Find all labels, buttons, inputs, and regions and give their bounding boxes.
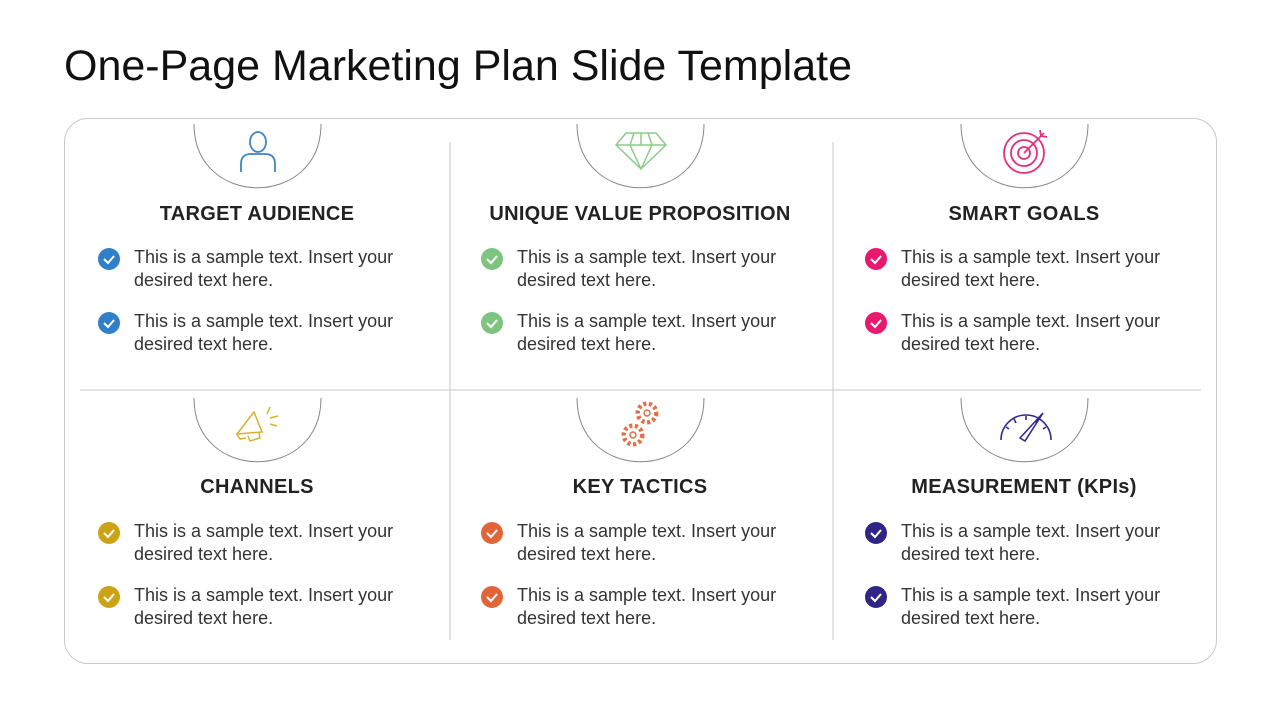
panel: measurement: desired text here. bbox=[901, 544, 1040, 564]
panel: key tactics: KEY TACTICS bbox=[573, 476, 707, 498]
panel: channels bbox=[98, 476, 393, 628]
panel: key tactics bbox=[481, 476, 776, 628]
panel: unique value proposition bbox=[481, 203, 791, 354]
panel: channels: CHANNELS bbox=[200, 476, 314, 498]
panel: smart goals bbox=[865, 203, 1160, 354]
icon: gauge bbox=[1000, 412, 1052, 442]
panel: channels: This is a sample text. Insert your bbox=[134, 585, 393, 605]
panel: key tactics: This is a sample text. Insert your bbox=[517, 585, 776, 605]
panel: target audience: This is a sample text. Insert your bbox=[134, 247, 393, 267]
icon: gears bbox=[622, 402, 658, 446]
panel: smart goals: desired text here. bbox=[901, 270, 1040, 290]
panel: unique value proposition: This is a sample text. Insert your bbox=[517, 247, 776, 267]
panel: smart goals: SMART GOALS bbox=[948, 203, 1100, 225]
icon: person bbox=[240, 131, 276, 172]
panel: unique value proposition: This is a sample text. Insert your bbox=[517, 311, 776, 331]
panel: target audience: TARGET AUDIENCE bbox=[160, 203, 354, 225]
panel: measurement bbox=[865, 476, 1160, 628]
panel: unique value proposition: desired text here. bbox=[517, 334, 656, 354]
panel: unique value proposition: desired text here. bbox=[517, 270, 656, 290]
panel: key tactics: desired text here. bbox=[517, 608, 656, 628]
main card bbox=[64, 118, 1217, 664]
panel: target audience: This is a sample text. Insert your bbox=[134, 311, 393, 331]
icon: diamond bbox=[615, 132, 667, 170]
panel: smart goals: This is a sample text. Insert your bbox=[901, 247, 1160, 267]
panel: measurement: desired text here. bbox=[901, 608, 1040, 628]
panel: smart goals: desired text here. bbox=[901, 334, 1040, 354]
panel: measurement: This is a sample text. Insert your bbox=[901, 585, 1160, 605]
panel: unique value proposition: UNIQUE VALUE PROPOSITION bbox=[489, 203, 791, 225]
panel: key tactics: This is a sample text. Insert your bbox=[517, 521, 776, 541]
panel: target audience: desired text here. bbox=[134, 270, 273, 290]
panel: target audience bbox=[98, 203, 393, 354]
panel: channels: desired text here. bbox=[134, 544, 273, 564]
title: One-Page Marketing Plan Slide Template bbox=[64, 42, 852, 90]
panel: channels: This is a sample text. Insert your bbox=[134, 521, 393, 541]
panel: channels: desired text here. bbox=[134, 608, 273, 628]
panel: smart goals: This is a sample text. Insert your bbox=[901, 311, 1160, 331]
icon: target bbox=[1003, 130, 1048, 174]
panel: key tactics: desired text here. bbox=[517, 544, 656, 564]
icon: megaphone bbox=[235, 406, 278, 442]
panel: measurement: MEASUREMENT (KPIs) bbox=[911, 476, 1137, 498]
panel: target audience: desired text here. bbox=[134, 334, 273, 354]
panel: measurement: This is a sample text. Insert your bbox=[901, 521, 1160, 541]
